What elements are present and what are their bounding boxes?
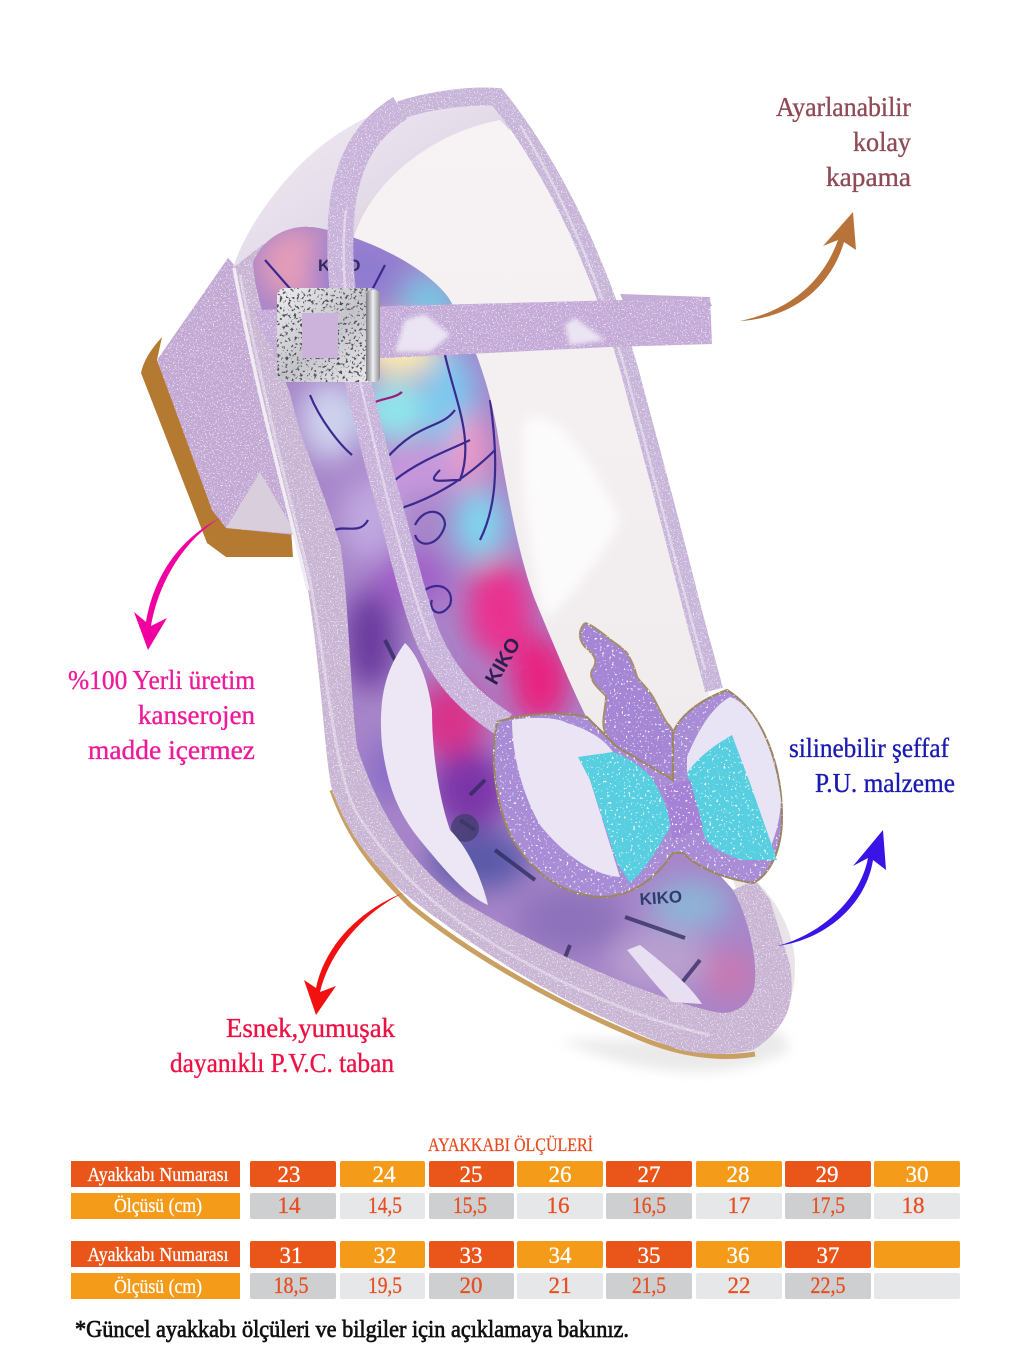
row 3: shoe numbers: Ayakkabı Numarası xyxy=(88,1244,229,1266)
row 2: measurements: 17 xyxy=(728,1193,750,1218)
shoe photo: transparent glitter heeled shoe xyxy=(141,88,795,1072)
left wing xyxy=(578,752,670,883)
holographic insole xyxy=(240,220,780,1020)
row 1: shoe numbers: Ayakkabı Numarası xyxy=(88,1164,229,1186)
insole marks xyxy=(385,640,700,985)
buckle xyxy=(277,288,380,382)
table title: AYAKKABI ÖLÇÜLERİ xyxy=(428,1135,593,1156)
row 1: shoe numbers: 23 xyxy=(278,1162,300,1187)
row 4: measurements xyxy=(71,1273,960,1299)
label: silinebilir şeffaf: silinebilir şeffaf xyxy=(789,733,949,763)
unicorn line art xyxy=(265,260,495,613)
heel inner facet xyxy=(226,472,296,534)
row 3: shoe numbers: 33 xyxy=(460,1243,482,1268)
row 4: measurements: 22,5 xyxy=(810,1273,846,1298)
sole shadow xyxy=(560,1030,790,1072)
row 4: measurements: Ölçüsü (cm) xyxy=(114,1275,202,1298)
outer rand line xyxy=(240,275,710,1035)
ankle strap back xyxy=(620,294,712,306)
row 1: shoe numbers: 30 xyxy=(906,1162,928,1187)
label: Ayarlanabilir kolay kapama: Ayarlanabilir xyxy=(776,92,911,122)
insole logo: heel KIKO: KIKO xyxy=(318,256,360,275)
ankle strap xyxy=(253,297,712,358)
arrow: closure xyxy=(740,212,856,321)
row 2: measurements: 18 xyxy=(902,1193,924,1218)
heel sole xyxy=(141,337,293,557)
label: Esnek,yumuşak: dayanıklı P.V.C. taban xyxy=(170,1048,394,1078)
row 4: measurements: 21,5 xyxy=(632,1273,666,1298)
right strap edge xyxy=(400,97,714,690)
clear edge along heel xyxy=(234,268,308,590)
row 1: shoe numbers: 26 xyxy=(548,1162,572,1187)
reflection: side xyxy=(381,643,488,905)
label: silinebilir şeffaf xyxy=(789,733,955,798)
label: %100 Yerli üretim: kanserojen xyxy=(138,700,255,730)
sole edge xyxy=(332,790,755,1056)
row 2: measurements: 16 xyxy=(546,1193,570,1218)
row 2: measurements: 14 xyxy=(278,1193,301,1218)
arrow: material xyxy=(777,830,886,946)
row 4: measurements: 18,5 xyxy=(274,1273,308,1298)
row 1: shoe numbers: 25 xyxy=(460,1162,482,1187)
row 2: measurements: 14,5 xyxy=(368,1193,402,1218)
label: Esnek,yumuşak: Esnek,yumuşak xyxy=(226,1013,395,1043)
label: Ayarlanabilir kolay kapama: kapama xyxy=(826,162,911,192)
insole logo: KIKO: KIKO xyxy=(481,634,525,688)
row 3: shoe numbers: 36 xyxy=(726,1243,750,1268)
row 3: shoe numbers: 35 xyxy=(638,1243,660,1268)
heel counter xyxy=(233,88,510,268)
size table xyxy=(71,1135,960,1299)
arrow: heel xyxy=(134,517,222,650)
horn xyxy=(580,623,680,780)
row 1: shoe numbers: 28 xyxy=(726,1162,750,1187)
label: silinebilir şeffaf: P.U. malzeme xyxy=(815,768,955,798)
row 3: shoe numbers: 32 xyxy=(374,1243,396,1268)
row 3: shoe numbers: 34 xyxy=(548,1243,572,1268)
label: Ayarlanabilir kolay kapama xyxy=(776,92,911,192)
row 3: shoe numbers: 31 xyxy=(280,1243,302,1268)
heel block xyxy=(157,258,300,535)
row 4: measurements: 21 xyxy=(548,1273,572,1298)
reflection: toe xyxy=(627,945,702,1004)
label: %100 Yerli üretim: %100 Yerli üretim xyxy=(68,665,255,695)
row 2: measurements: Ölçüsü (cm) xyxy=(114,1194,202,1217)
clear body and rand xyxy=(233,225,792,1054)
toe clear vamp xyxy=(715,860,795,1048)
row 3: shoe numbers xyxy=(71,1241,960,1268)
right ear xyxy=(687,697,781,860)
row 1: shoe numbers: 24 xyxy=(372,1162,396,1187)
row 1: shoe numbers: 29 xyxy=(816,1162,838,1187)
row 2: measurements: 17,5 xyxy=(811,1193,845,1218)
label: Esnek,yumuşak xyxy=(170,1013,395,1078)
knot xyxy=(663,780,703,840)
insole logo: faded KIKO: KIKO xyxy=(639,887,683,909)
label: %100 Yerli üretim xyxy=(68,665,255,765)
glitter backing xyxy=(494,690,782,897)
label: Ayarlanabilir kolay kapama: kolay xyxy=(853,127,911,157)
arrow: sole xyxy=(304,893,403,1015)
unicorn bow ornament xyxy=(494,623,782,897)
window: clear upper xyxy=(352,120,720,760)
row 2: measurements xyxy=(71,1193,960,1219)
row 2: measurements: 16,5 xyxy=(632,1193,666,1218)
left strap edge xyxy=(340,108,505,725)
row 4: measurements: 22 xyxy=(728,1273,750,1298)
right wing xyxy=(687,735,777,860)
row 4: measurements: 20 xyxy=(460,1273,482,1298)
strap highlight lines xyxy=(344,125,705,670)
footnote: *Güncel ayakkabı ölçüleri ve bilgiler için açıklamaya bakınız. xyxy=(75,1317,629,1343)
label: %100 Yerli üretim: madde içermez xyxy=(88,735,255,765)
row 3: shoe numbers: 37 xyxy=(816,1243,840,1268)
row 1: shoe numbers xyxy=(71,1161,960,1187)
row 1: shoe numbers: 27 xyxy=(638,1162,660,1187)
row 4: measurements: 19,5 xyxy=(368,1273,402,1298)
strap highlights xyxy=(395,314,605,352)
row 2: measurements: 15,5 xyxy=(453,1193,487,1218)
clear highlight xyxy=(524,417,620,620)
left ear xyxy=(512,718,620,877)
